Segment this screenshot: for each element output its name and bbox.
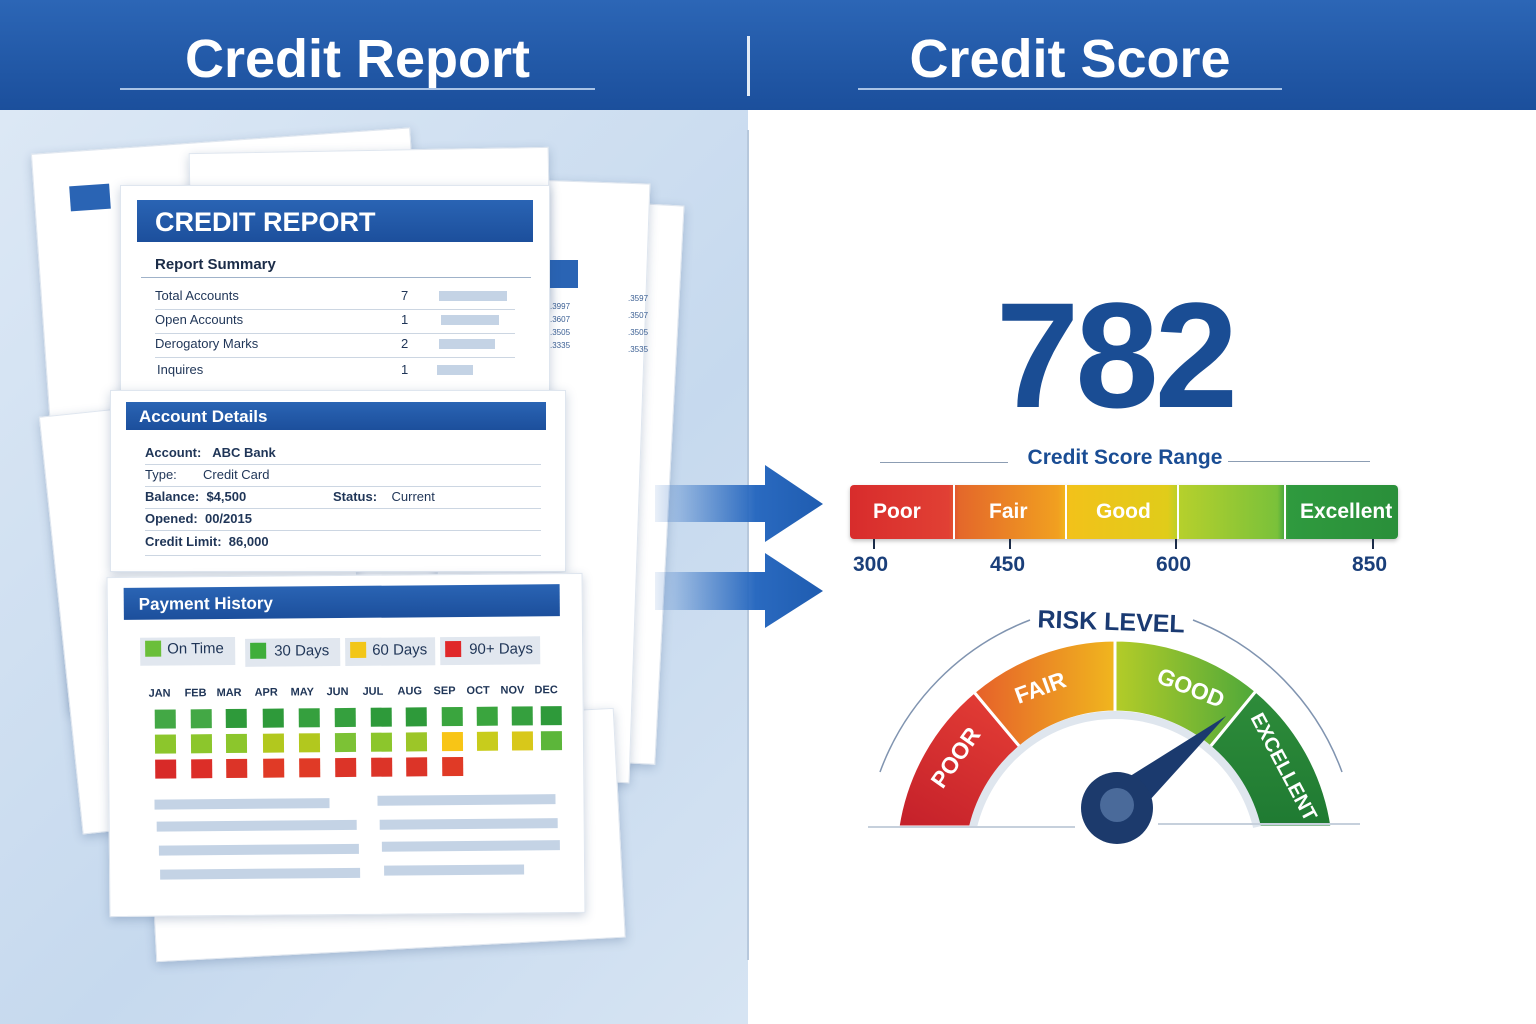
table: summary rows: Derogatory Marks	[155, 336, 258, 351]
illustration: stack of credit report documents: .3335	[550, 341, 570, 350]
title: Credit Report: Credit Report	[185, 29, 530, 89]
bar: score range scale: Poor	[873, 500, 921, 523]
text: account fields: Account: ABC Bank	[145, 445, 276, 460]
bar: score range scale: Fair	[989, 500, 1028, 523]
table: summary rows	[155, 288, 515, 377]
chart: monthly payment grid: OCT	[466, 685, 490, 697]
text: account fields: Credit Limit: 86,000	[145, 534, 269, 549]
legend: On Time	[167, 640, 224, 658]
heading: CREDIT REPORT	[137, 200, 533, 242]
chart: monthly payment grid: JUL	[362, 686, 383, 698]
text: account fields	[145, 445, 541, 556]
table: summary rows: 2	[401, 336, 408, 351]
legend	[140, 636, 540, 667]
table: summary rows: Inquires	[157, 362, 203, 377]
chart: monthly payment grid: AUG	[397, 685, 422, 698]
table: summary rows: Open Accounts	[155, 312, 243, 327]
legend: 60 Days	[372, 641, 427, 659]
chart: monthly payment grid: APR	[254, 687, 278, 699]
title: Credit Score: Credit Score	[909, 29, 1231, 89]
heading: Payment History	[124, 584, 560, 620]
text: Report Summary: Report Summary	[155, 256, 276, 273]
text: account fields: Balance: $4,500	[145, 489, 246, 504]
illustration: stack of credit report documents: .3607	[550, 315, 570, 324]
table: summary rows: 7	[401, 288, 408, 303]
chart: monthly payment grid: FEB	[184, 687, 207, 699]
gauge: risk level: EXCELLENT	[1246, 710, 1321, 825]
text: account fields: Opened: 00/2015	[145, 511, 252, 526]
gauge: risk level: FAIR	[1011, 666, 1070, 709]
bar: score range scale: 850	[1352, 553, 1387, 576]
bar: score range scale: Excellent	[1300, 500, 1392, 523]
heading: Credit Score Range: Credit Score Range	[1028, 446, 1222, 469]
gauge: risk level	[868, 605, 1360, 844]
table: summary rows: 1	[401, 362, 408, 377]
illustration: stack of credit report documents: .3997	[550, 302, 570, 311]
chart: monthly payment grid: JUN	[326, 686, 349, 698]
bar: score range scale: Good	[1096, 500, 1151, 523]
label: RISK LEVEL: RISK LEVEL	[1037, 605, 1185, 639]
legend: 90+ Days	[469, 640, 533, 658]
gauge: risk level: POOR	[925, 722, 986, 793]
illustration: stack of credit report documents: .3505	[550, 328, 570, 337]
bar: score range scale: 300	[853, 553, 888, 576]
chart: monthly payment grid: MAR	[216, 687, 242, 699]
guide arc	[880, 620, 1030, 772]
bar: score range scale: 450	[990, 553, 1025, 576]
needle	[1081, 716, 1226, 844]
heading: CREDIT REPORT: CREDIT REPORT	[155, 207, 376, 237]
gauge segments	[898, 640, 1332, 827]
chart: monthly payment grid: DEC	[534, 684, 558, 696]
bar: score range scale	[848, 484, 1400, 576]
heading: Payment History: Payment History	[139, 594, 273, 614]
heading: Account Details: Account Details	[139, 407, 267, 426]
document card: payment history	[107, 573, 585, 917]
chart: monthly payment grid: JAN	[148, 688, 171, 700]
document card: account details	[110, 390, 566, 572]
text: account fields: Status: Current	[333, 489, 435, 504]
heading: Account Details	[126, 402, 546, 430]
illustration: stack of credit report documents: .3505	[628, 328, 648, 337]
legend: 30 Days	[274, 642, 329, 660]
gauge: risk level: GOOD	[1154, 662, 1228, 713]
illustration: stack of credit report documents: .3507	[628, 311, 648, 320]
chart: monthly payment grid: NOV	[500, 684, 524, 697]
table: summary rows: Total Accounts	[155, 288, 239, 303]
big score number: 782	[996, 271, 1234, 439]
document card: credit report summary	[120, 185, 550, 395]
table: summary rows: 1	[401, 312, 408, 327]
illustration: stack of credit report documents: .3535	[628, 345, 648, 354]
illustration: stack of credit report documents: .3597	[628, 294, 648, 303]
chart: monthly payment grid	[148, 684, 562, 779]
chart: monthly payment grid: MAY	[290, 686, 314, 698]
chart: monthly payment grid: SEP	[433, 685, 456, 697]
header bar	[0, 0, 1536, 110]
text: account fields: Credit Card	[203, 467, 269, 482]
illustration: stack of credit report documents	[27, 126, 688, 969]
text: account fields: Type:	[145, 467, 177, 482]
arrows pointing to score	[655, 465, 823, 628]
background: left panel	[0, 110, 748, 1024]
bar: score range scale: 600	[1156, 553, 1191, 576]
